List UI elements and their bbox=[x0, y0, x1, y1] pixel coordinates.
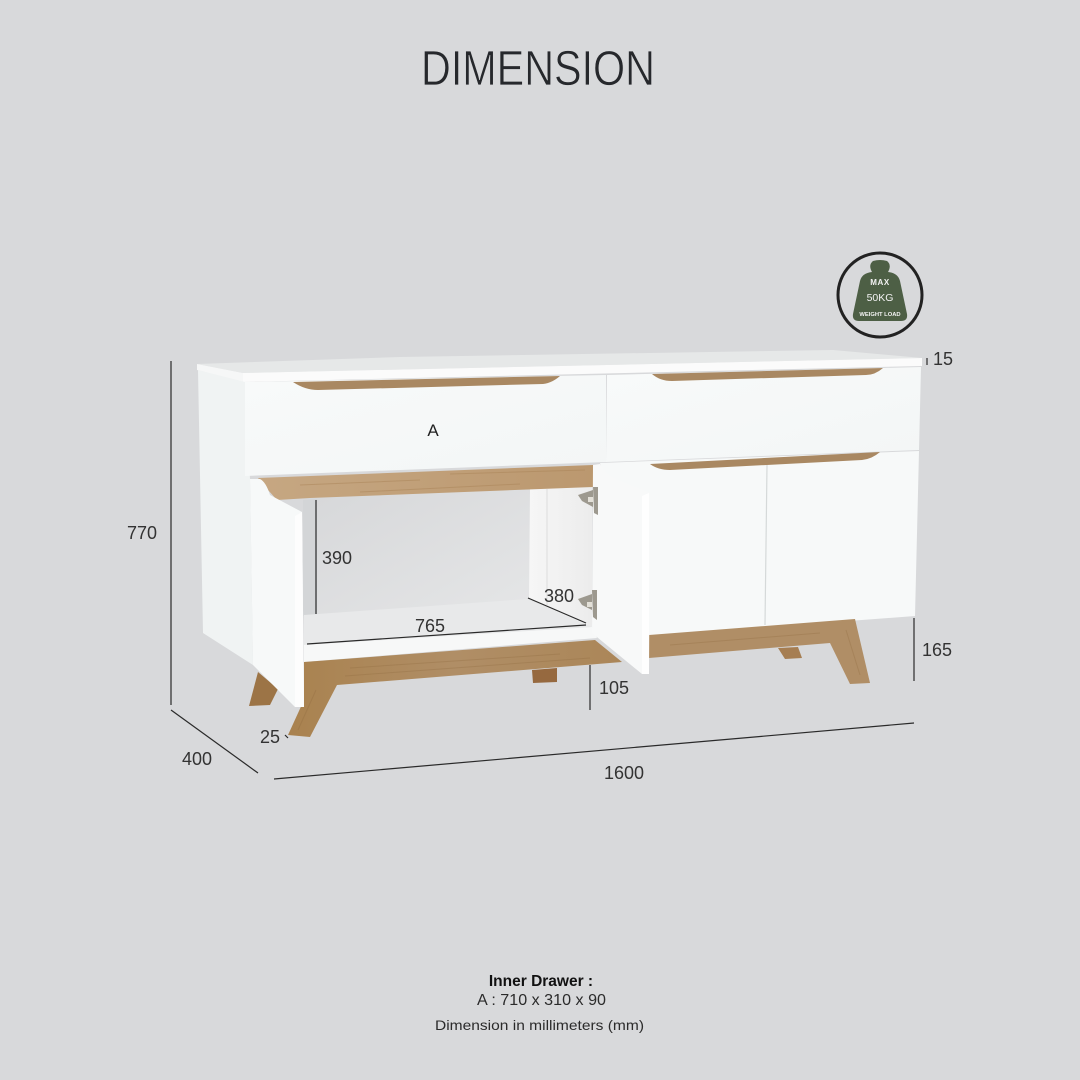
icon: max weight load badge: WEIGHT LOAD bbox=[859, 312, 901, 318]
left side panel bbox=[198, 370, 253, 665]
footer notes bbox=[435, 973, 644, 1033]
open right door bbox=[592, 464, 650, 674]
dimension: height 770: 770 bbox=[127, 523, 157, 543]
footer notes: Dimension in millimeters (mm) bbox=[435, 1017, 644, 1033]
dimension: inner depth 380 bbox=[528, 586, 586, 623]
bottom wood rail with front leg bbox=[288, 640, 622, 737]
title: DIMENSION bbox=[421, 42, 655, 96]
footer notes: A : 710 x 310 x 90 bbox=[477, 992, 606, 1009]
icon: max weight load badge: 50KG bbox=[867, 292, 893, 304]
interior left side bbox=[303, 499, 317, 616]
dimension: clearance 105 bbox=[590, 665, 629, 710]
dimension: top thickness 15: 15 bbox=[933, 349, 953, 369]
rear legs bbox=[249, 647, 802, 706]
dimension: inner width 765 bbox=[307, 616, 586, 644]
interior back wall bbox=[303, 487, 535, 616]
interior floor bbox=[304, 599, 592, 646]
sideboard bbox=[197, 350, 922, 737]
dimension: inner height 390 bbox=[316, 500, 352, 614]
hinge upper bbox=[578, 487, 598, 515]
dimension: clearance 105: 105 bbox=[599, 678, 629, 698]
icon: max weight load badge bbox=[838, 253, 922, 337]
right cabinet doors bbox=[600, 451, 919, 636]
dimension: leg height 165 bbox=[914, 618, 952, 681]
wood shelf beam bbox=[258, 465, 593, 500]
dimension: leg width 25: 25 bbox=[260, 727, 280, 747]
open left door bbox=[250, 479, 304, 707]
dimension: inner height 390: 390 bbox=[322, 548, 352, 568]
front plinth edge bbox=[304, 627, 597, 662]
dimension: inner depth 380: 380 bbox=[544, 586, 574, 606]
drawer A bbox=[245, 375, 606, 476]
hinge lower bbox=[578, 590, 597, 620]
footer notes: Inner Drawer : bbox=[489, 973, 593, 990]
dimension: depth 400: 400 bbox=[182, 749, 212, 769]
interior right partition bbox=[529, 486, 592, 628]
tabletop bbox=[197, 350, 922, 382]
dimension: leg height 165: 165 bbox=[922, 640, 952, 660]
dimension: width 1600 bbox=[274, 723, 914, 783]
icon: max weight load badge: MAX bbox=[870, 278, 890, 287]
drawer label A: A bbox=[427, 421, 439, 440]
right wood rail with leg bbox=[649, 619, 870, 684]
drawer right bbox=[606, 367, 921, 462]
dimension: depth 400 bbox=[171, 710, 258, 773]
dimension: width 1600: 1600 bbox=[604, 763, 644, 783]
dimension: inner width 765: 765 bbox=[415, 616, 445, 636]
